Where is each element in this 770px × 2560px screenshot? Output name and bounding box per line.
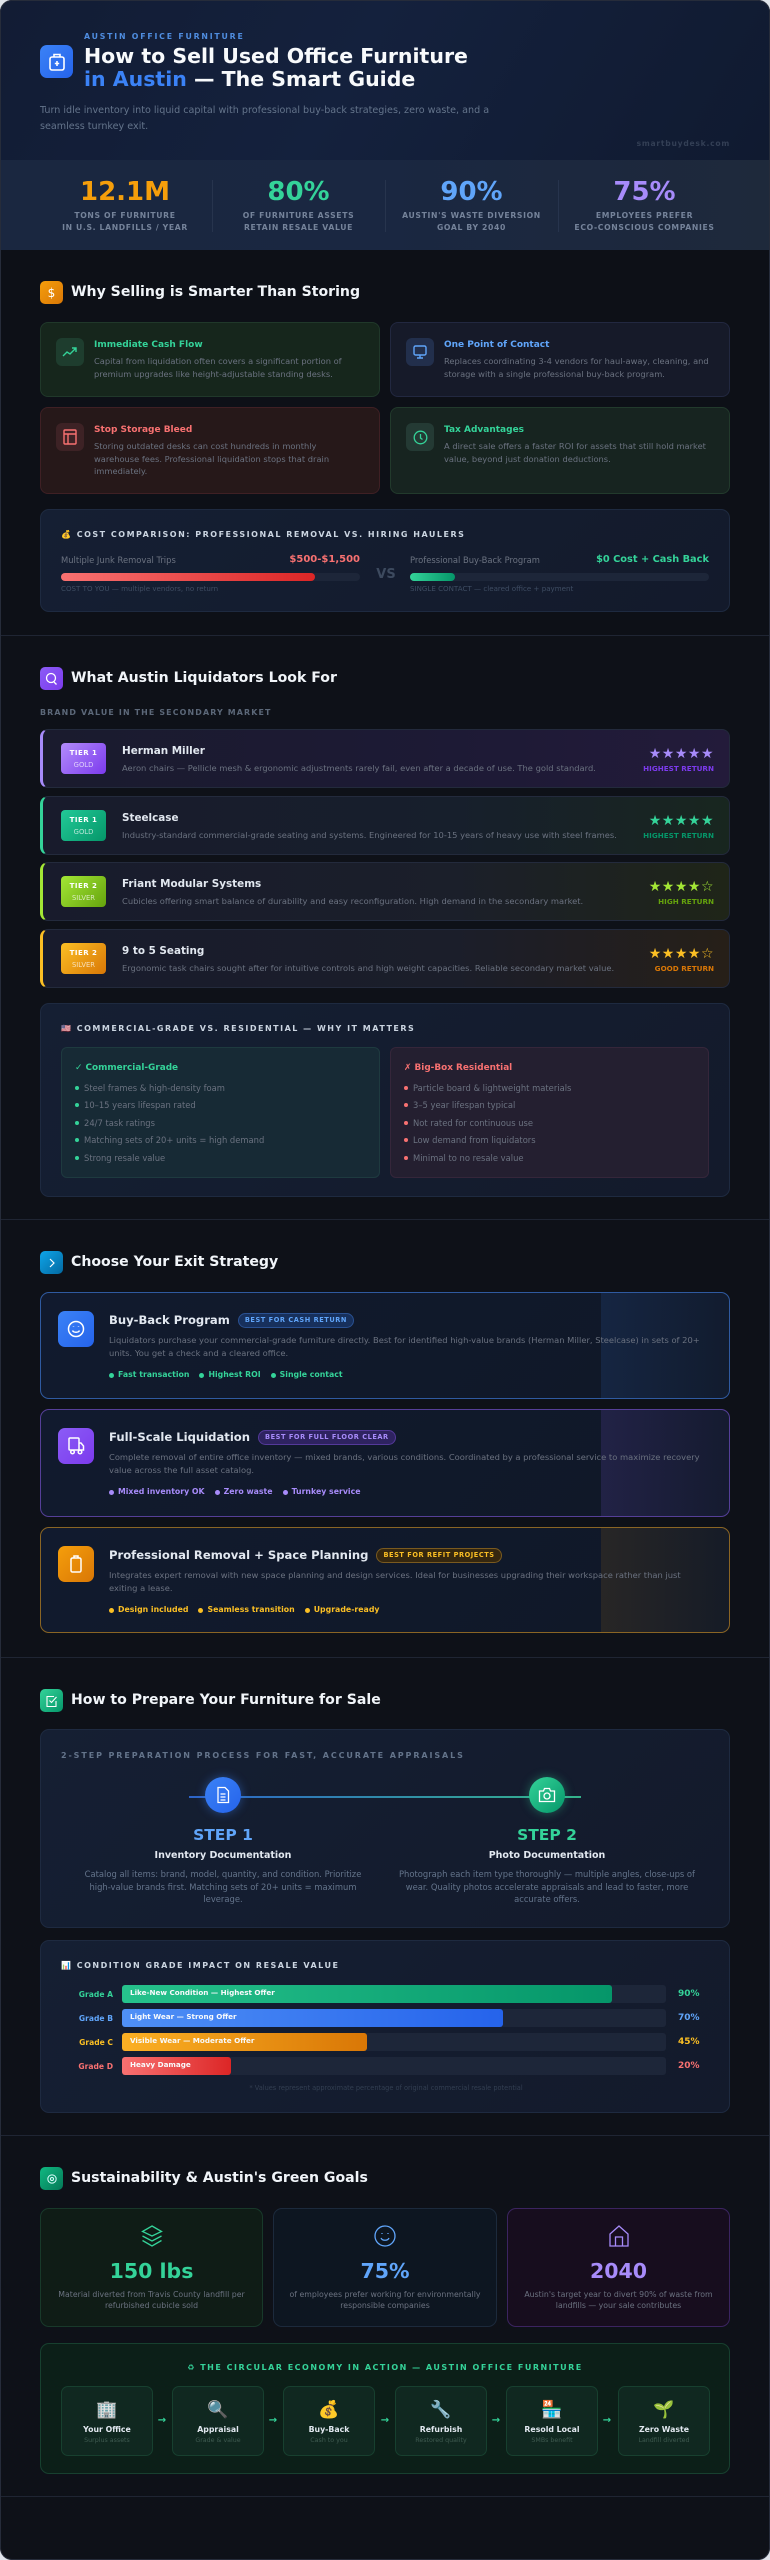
card: removal and space planning [40, 1527, 730, 1633]
description [109, 1335, 700, 1358]
return label: GOOD RETURN [655, 964, 714, 973]
badge: SILVER [72, 894, 95, 902]
description [41, 2289, 262, 2311]
description: storage with a single professional buy-back program. [444, 369, 665, 379]
title and badge: Full-Scale Liquidation [109, 1430, 250, 1444]
title and badge: Buy-Back Program [109, 1313, 230, 1327]
node: resold local [506, 2386, 598, 2456]
tier row: 9 to 5 [40, 929, 730, 988]
box: big-box residential: Minimal to no resale value [413, 1153, 524, 1163]
stars: ★★★★★ [649, 746, 714, 762]
main title: How to Sell Used Office Furniture [84, 44, 468, 68]
description [508, 2289, 729, 2311]
value: 2040 [590, 2259, 647, 2283]
tags: Upgrade-ready [314, 1605, 379, 1614]
icon: home [508, 2225, 729, 2247]
tags: Fast transaction [118, 1370, 189, 1379]
icon: search [40, 667, 63, 690]
panel: circular economy [40, 2343, 730, 2474]
return label: HIGHEST RETURN [643, 764, 714, 773]
stat: employees [574, 177, 715, 232]
panel: commercial vs residential [40, 1003, 730, 1197]
box heading: ✗ Big-Box Residential [404, 1063, 512, 1073]
title and badge [109, 1548, 502, 1563]
box: big-box residential: Low demand from liquidators [413, 1135, 536, 1145]
stat: tons: 12.1M [80, 177, 170, 207]
section: liquidators [0, 635, 770, 1219]
right comparison [410, 554, 710, 593]
tags [109, 1370, 343, 1379]
node: your office: 🏢 [96, 2400, 118, 2420]
card: tax advantages [390, 407, 730, 494]
step label: STEP 1 [193, 1826, 253, 1844]
step description: accurate offers. [514, 1894, 580, 1904]
description: Industry-standard commercial-grade seating and systems. Engineered for 10-15 years of heavy use with steel frames. [122, 830, 617, 840]
badge: TIER 1 [70, 816, 97, 824]
description: Liquidators purchase your commercial-grade furniture directly. Best for identified high-value brands (Herman Miller, Steelcase) in sets of 20+ [109, 1335, 700, 1345]
tier row: Herman Miller [40, 729, 730, 788]
badge: GOLD [74, 828, 93, 836]
tags: Mixed inventory OK [118, 1487, 205, 1496]
bar [61, 573, 360, 581]
node: zero waste: Zero Waste [639, 2425, 689, 2434]
stat: tons: IN U.S. LANDFILLS / YEAR [62, 223, 188, 232]
node: zero waste: 🌱 [653, 2400, 675, 2420]
sub label: BRAND VALUE IN THE SECONDARY MARKET [40, 708, 272, 717]
description [94, 441, 329, 476]
badge: TIER 2 [70, 882, 97, 890]
stat card: 2040 [507, 2208, 730, 2327]
stat: resale [243, 177, 354, 232]
section: sustainability [0, 2135, 770, 2496]
arrow: → [269, 2415, 277, 2426]
heading text: Choose Your Exit Strategy [71, 1254, 278, 1270]
stat: diversion: 90% [440, 177, 503, 207]
label: Grade B [79, 2014, 113, 2023]
arrow: → [381, 2415, 389, 2426]
arrow: → [158, 2415, 166, 2426]
description: Capital from liquidation often covers a significant portion of [94, 356, 342, 366]
section heading [40, 1251, 278, 1274]
title and badge [109, 1430, 396, 1445]
stat: resale: 80% [267, 177, 330, 207]
badge [61, 876, 106, 907]
panel title: 2-STEP PREPARATION PROCESS FOR FAST, ACCURATE APPRAISALS [61, 1751, 465, 1760]
icon: chevron [40, 1251, 63, 1274]
title and badge: BEST FOR CASH RETURN [245, 1316, 347, 1324]
stats band [0, 160, 770, 250]
stars: ★★★★☆ [649, 946, 714, 962]
main title: in Austin — The Smart Guide [84, 66, 415, 90]
description: value across the full asset catalog. [109, 1465, 254, 1475]
card: stop storage bleed [40, 407, 380, 494]
stat cards [40, 2208, 730, 2327]
panel title: 🇺🇸 COMMERCIAL-GRADE VS. RESIDENTIAL — WHY IT MATTERS [61, 1024, 415, 1033]
stat: tons: TONS OF FURNITURE [74, 211, 176, 220]
badge [61, 943, 106, 974]
stat card: 75% [273, 2208, 497, 2327]
label: Multiple Junk Removal Trips [61, 555, 176, 565]
description: units. You get a check and a cleared office. [109, 1348, 288, 1358]
icon: clipboard [58, 1546, 94, 1582]
bar: Visible Wear — Moderate Offer [130, 2036, 254, 2045]
panel: cost comparison [40, 509, 730, 612]
tags [109, 1487, 360, 1496]
title: One Point of Contact [444, 340, 549, 350]
left comparison [61, 554, 360, 593]
badge: TIER 2 [70, 949, 97, 957]
bar [122, 2009, 666, 2027]
node: buy-back: Buy-Back [309, 2425, 349, 2434]
VS label: VS [376, 567, 396, 582]
subtitle: seamless turnkey exit. [40, 121, 148, 132]
badge: SILVER [72, 961, 95, 969]
badge [61, 810, 106, 841]
card: full-scale liquidation [40, 1409, 730, 1517]
step description [399, 1869, 696, 1904]
icon: trend [56, 338, 84, 366]
description: Material diverted from Travis County landfill per [58, 2290, 245, 2299]
card: immediate cash flow [40, 322, 380, 397]
panel title: ♻ THE CIRCULAR ECONOMY IN ACTION — AUSTIN OFFICE FURNITURE [187, 2363, 583, 2372]
grade B row [61, 2009, 711, 2028]
description: Aeron chairs — Pellicle mesh & ergonomic adjustments rarely fail, even after a decade of use. The gold standard. [122, 763, 596, 773]
step title: Photo Documentation [489, 1850, 605, 1861]
box: big-box residential: Particle board & lightweight materials [413, 1083, 571, 1093]
node: buy-back: Cash to you [310, 2437, 348, 2444]
tags: Design included [118, 1605, 188, 1614]
tags [109, 1605, 380, 1614]
value: 150 lbs [110, 2259, 193, 2283]
label: Grade D [78, 2062, 113, 2071]
value: $500-$1,500 [289, 554, 360, 565]
node: your office [61, 2386, 153, 2456]
node: refurbish: Refurbish [420, 2425, 462, 2434]
section heading [40, 667, 337, 690]
description: A direct sale offers a faster ROI for assets that still hold market [444, 441, 706, 451]
description: immediately. [94, 466, 147, 476]
step description: wear. Quality photos accelerate appraisals and lead to faster, more [406, 1882, 688, 1892]
title and badge: Professional Removal + Space Planning [109, 1548, 368, 1562]
value: 90% [678, 1989, 700, 1999]
box: commercial grade: 10–15 years lifespan rated [84, 1100, 196, 1110]
box: big-box residential: Not rated for continuous use [413, 1118, 533, 1128]
value: 70% [678, 2013, 700, 2023]
title and badge [109, 1313, 354, 1328]
node: resold local: 🏪 [541, 2400, 563, 2420]
step description: high-value brands first. Matching sets of 20+ units = maximum [89, 1882, 357, 1892]
badge: TIER 1 [70, 749, 97, 757]
description: landfills — your sale contributes [556, 2301, 681, 2310]
stat: diversion: AUSTIN'S WASTE DIVERSION [402, 211, 541, 220]
step description: Catalog all items: brand, model, quantity, and condition. Prioritize [85, 1869, 361, 1879]
grade C row [61, 2033, 711, 2052]
icon: checklist [40, 1689, 63, 1712]
arrow: → [492, 2415, 500, 2426]
icon: briefcase [40, 45, 73, 78]
icon: monitor [406, 338, 434, 366]
box heading: ✓ Commercial-Grade [75, 1063, 178, 1073]
description [444, 356, 709, 379]
box: commercial grade [61, 1047, 380, 1178]
box: big-box residential [390, 1047, 709, 1178]
node: resold local: SMBs benefit [531, 2437, 573, 2444]
description: exiting a lease. [109, 1583, 173, 1593]
icon: dollar [40, 281, 63, 304]
footnote: * Values represent approximate percentage of original commercial resale potential [249, 2084, 523, 2092]
source url: smartbuydesk.com [637, 139, 730, 148]
section heading [40, 281, 360, 304]
node: zero waste: Landfill diverted [638, 2437, 690, 2444]
node: resold local: Resold Local [524, 2425, 580, 2434]
box: commercial grade: Matching sets of 20+ units = high demand [84, 1135, 264, 1145]
stat: resale: RETAIN RESALE VALUE [244, 223, 353, 232]
node: refurbish [395, 2386, 487, 2456]
icon: layers [41, 2225, 262, 2247]
icon: smile [58, 1311, 94, 1347]
description: Integrates expert removal with new space planning and design services. Ideal for businesses upgrading their workspace rather than just [109, 1570, 681, 1580]
box: commercial grade: Steel frames & high-density foam [84, 1083, 225, 1093]
label: Professional Buy-Back Program [410, 555, 540, 565]
tags: Turnkey service [292, 1487, 360, 1496]
badge [61, 743, 106, 774]
subtitle [40, 105, 489, 132]
step description: Photograph each item type thoroughly — multiple angles, close-ups of [399, 1869, 695, 1879]
step description [85, 1869, 361, 1904]
stat: employees: ECO-CONSCIOUS COMPANIES [574, 223, 715, 232]
hero header [0, 0, 770, 160]
bar: Like-New Condition — Highest Offer [130, 1988, 275, 1997]
section: preparation [0, 1657, 770, 2135]
panel title: 💰 COST COMPARISON: PROFESSIONAL REMOVAL VS. HIRING HAULERS [61, 530, 465, 539]
brand name: Steelcase [122, 812, 179, 824]
description: Cubicles offering smart balance of durability and easy reconfiguration. High demand in the secondary market. [122, 896, 583, 906]
node: your office: Your Office [83, 2425, 131, 2434]
node: refurbish: Restored quality [415, 2437, 467, 2444]
value: 45% [678, 2037, 700, 2047]
description: Ergonomic task chairs sought after for intuitive controls and high weight capacities. Reliable secondary market value. [122, 963, 614, 973]
value: 20% [678, 2061, 700, 2071]
section: why selling [0, 250, 770, 635]
bar: Light Wear — Strong Offer [130, 2012, 237, 2021]
value: 75% [360, 2259, 410, 2283]
tags: Highest ROI [208, 1370, 261, 1379]
label: Grade A [79, 1990, 113, 1999]
description [274, 2289, 496, 2311]
title: Tax Advantages [444, 425, 524, 435]
connector line [189, 1796, 581, 1798]
node: appraisal: 🔍 [207, 2400, 229, 2420]
node: buy-back: 💰 [318, 2400, 340, 2420]
description [109, 1452, 700, 1475]
icon: truck [58, 1428, 94, 1464]
badge: GOLD [74, 761, 93, 769]
heading text: Sustainability & Austin's Green Goals [71, 2170, 368, 2186]
description: warehouse fees. Professional liquidation stops that drain [94, 454, 329, 464]
note: SINGLE CONTACT — cleared office + payment [410, 584, 573, 593]
brand name: 9 to 5 Seating [122, 945, 204, 957]
description: premium upgrades like height-adjustable standing desks. [94, 369, 333, 379]
step title: Inventory Documentation [155, 1850, 291, 1861]
step description: leverage. [203, 1894, 243, 1904]
node: appraisal: Appraisal [197, 2425, 239, 2434]
bar [410, 573, 709, 581]
description: responsible companies [340, 2301, 430, 2310]
step 1 [85, 1772, 361, 1904]
description: Austin's target year to divert 90% of waste from [524, 2290, 713, 2299]
description: refurbished cubicle sold [105, 2301, 198, 2310]
stat: diversion [402, 177, 541, 232]
stat: employees: 75% [613, 177, 676, 207]
note: COST TO YOU — multiple vendors, no return [61, 584, 218, 593]
stat: resale: OF FURNITURE ASSETS [243, 211, 354, 220]
description: Complete removal of entire office inventory — mixed brands, various conditions. Coordinated by a professional service to maximize recovery [109, 1452, 700, 1462]
stat: diversion: GOAL BY 2040 [437, 223, 506, 232]
title: Stop Storage Bleed [94, 425, 192, 435]
bar [122, 2033, 666, 2051]
description: of employees prefer working for environmentally [289, 2290, 480, 2299]
card: buy-back program [40, 1292, 730, 1399]
title and badge: BEST FOR FULL FLOOR CLEAR [265, 1432, 389, 1440]
tags: Zero waste [224, 1487, 273, 1496]
description [109, 1570, 681, 1593]
description [94, 356, 342, 379]
stars: ★★★★☆ [649, 879, 714, 895]
tags: Seamless transition [207, 1605, 295, 1614]
title: Immediate Cash Flow [94, 340, 203, 350]
icon: camera [529, 1777, 565, 1813]
icon: eye [40, 2167, 63, 2190]
panel: 2-step process [40, 1729, 730, 1928]
tier row: Friant [40, 862, 730, 921]
arrow: → [603, 2415, 611, 2426]
eyebrow label: AUSTIN OFFICE FURNITURE [84, 32, 245, 41]
icon: smile [274, 2225, 496, 2247]
tags: Single contact [280, 1370, 343, 1379]
return label: HIGHEST RETURN [643, 831, 714, 840]
section: exit strategy [0, 1219, 770, 1657]
panel title: 📊 CONDITION GRADE IMPACT ON RESALE VALUE [61, 1961, 339, 1970]
description: Storing outdated desks can cost hundreds in monthly [94, 441, 316, 451]
grade A row [79, 1985, 700, 2003]
section heading [40, 2167, 440, 2190]
node: appraisal [172, 2386, 264, 2456]
node: refurbish: 🔧 [430, 2400, 452, 2420]
return label: HIGH RETURN [658, 897, 714, 906]
value: $0 Cost + Cash Back [596, 554, 709, 565]
grade D row [61, 2057, 711, 2076]
box: commercial grade: 24/7 task ratings [84, 1118, 155, 1128]
panel: condition grade chart [40, 1940, 730, 2113]
box: commercial grade: Strong resale value [84, 1153, 165, 1163]
icon: dollar: $ [48, 286, 55, 300]
tier row: Steelcase [40, 796, 730, 855]
node: zero waste [618, 2386, 710, 2456]
node: appraisal: Grade & value [195, 2437, 241, 2444]
box: big-box residential: 3–5 year lifespan typical [413, 1100, 515, 1110]
label: Grade C [79, 2038, 113, 2047]
step label: STEP 2 [517, 1826, 577, 1844]
heading text: How to Prepare Your Furniture for Sale [71, 1692, 381, 1708]
bar [122, 2057, 666, 2075]
node: buy-back [283, 2386, 375, 2456]
card: one point of contact [390, 322, 730, 397]
description: Replaces coordinating 3-4 vendors for haul-away, cleaning, and [444, 356, 709, 366]
title and badge: BEST FOR REFIT PROJECTS [383, 1550, 495, 1558]
heading text: What Austin Liquidators Look For [71, 670, 337, 686]
brand name: Friant Modular Systems [122, 878, 261, 890]
bar [122, 1985, 666, 2003]
bar: Heavy Damage [130, 2060, 191, 2069]
icon: layout [56, 423, 84, 451]
stat card: 150 lbs [40, 2208, 263, 2327]
section heading [40, 1689, 381, 1712]
step 2 [399, 1772, 696, 1904]
icon: document [205, 1777, 241, 1813]
node: your office: Surplus assets [84, 2437, 130, 2444]
stars: ★★★★★ [649, 813, 714, 829]
icon: clock [406, 423, 434, 451]
stat: employees: EMPLOYEES PREFER [596, 211, 693, 220]
stat: tons [62, 177, 188, 232]
brand name: Herman Miller [122, 745, 205, 757]
heading text: Why Selling is Smarter Than Storing [71, 284, 360, 300]
main title [84, 44, 468, 90]
description: value, beyond just donation deductions. [444, 454, 611, 464]
subtitle: Turn idle inventory into liquid capital with professional buy-back strategies, zero waste, and a [40, 105, 489, 116]
description [444, 441, 706, 464]
